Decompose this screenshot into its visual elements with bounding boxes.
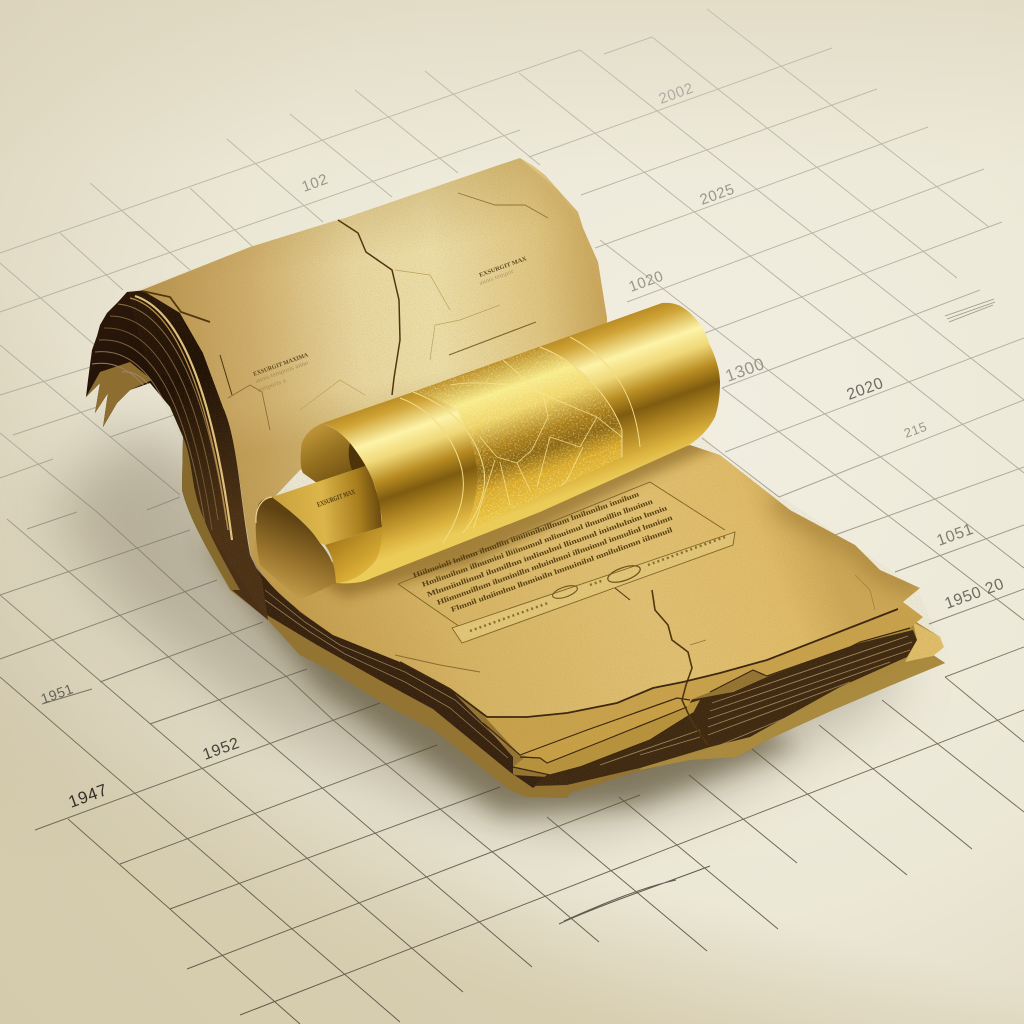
small text block, left of back page: EXSURGIT MAXIMA — [253, 352, 310, 378]
year labels on the grid: 2002 — [657, 80, 696, 108]
light corner sheet — [905, 622, 944, 662]
text lines — [412, 489, 674, 614]
slip of gold inside the curl — [325, 527, 382, 583]
burnt edge of the page — [775, 498, 920, 588]
text lines: Flmnil ulniimlnu llnmiuiln lmnuinilnl mnilulinmn iilmnuil — [450, 525, 674, 614]
small text on rolled sheet: EXSURGIT MAX — [316, 488, 356, 509]
text lines: Hmlinuilnm illnumini lliiinumnl mlinuimul ilnumillin llnuimn — [421, 497, 654, 589]
page lines along the crease — [265, 590, 508, 758]
curled loop interior — [256, 497, 336, 600]
third sheet — [520, 695, 695, 763]
fourth sheet — [513, 700, 700, 775]
golden scroll — [256, 303, 720, 600]
year labels on the grid: 1051 — [935, 521, 976, 550]
grainy base edge along the crease and bottom — [182, 490, 945, 798]
text panel frame — [398, 482, 725, 629]
rule line on back page — [449, 322, 536, 355]
back page shading — [142, 158, 607, 560]
sparkle texture in band — [414, 348, 622, 532]
text lines: Mlnmiiullinml ilumillnn imlinulmi llinumnl inimlulnim lmniu — [426, 503, 668, 599]
back page sheet — [142, 158, 607, 560]
year labels on the grid: 1952 — [201, 735, 242, 764]
year labels on the grid: 1300 — [723, 354, 767, 386]
year labels on the grid: 1020 — [627, 268, 666, 296]
page sheet — [252, 445, 920, 717]
decorated band — [413, 347, 622, 533]
bottom sheet, right corner — [640, 620, 945, 770]
year labels on the grid: 215 — [902, 419, 929, 441]
ornamental band — [452, 532, 735, 643]
page edge lines — [92, 296, 232, 540]
pen stroke near the bottom — [559, 866, 710, 924]
text lines: Hlimnnuillnm iluminilln mluinlmni illnuimnl inmulinl lmnimn — [436, 513, 674, 607]
book: page stack — [182, 490, 945, 798]
small stamp note, upper right — [945, 299, 995, 322]
page lines, right side — [600, 636, 912, 765]
cracks on back page — [142, 193, 548, 430]
text lines: Hiilmoinli lnilmn ilmuliin iiminniluillnum lmilnnilm innilum — [412, 489, 641, 580]
dark curled page stack — [86, 290, 268, 620]
year labels on the grid: 2020 — [845, 375, 886, 404]
small text block, left of back page: temporis a — [257, 378, 287, 394]
book: front open page — [252, 430, 920, 745]
loop rim — [256, 497, 272, 523]
small text block, right of back page: annis tempor — [479, 269, 515, 287]
dark page edges, right side — [533, 630, 917, 786]
year labels on the grid: 1950 20 — [943, 576, 1007, 613]
book: curled back page — [86, 158, 607, 620]
second sheet — [483, 602, 923, 755]
grainy outer strip — [182, 437, 240, 590]
small text block, right of back page — [479, 256, 528, 287]
cracks on front page — [395, 575, 875, 745]
torn page edge — [400, 609, 898, 717]
dark page edges along the crease — [232, 540, 547, 788]
torn tail of the stack — [86, 362, 152, 427]
year labels on the grid: 2025 — [698, 181, 737, 209]
lower rolled sheet — [272, 465, 382, 545]
inner wall of the roll — [301, 423, 372, 483]
year labels on the grid: 1947 — [66, 780, 110, 812]
leaf engraving — [450, 360, 622, 530]
roll body — [323, 303, 720, 583]
year labels on the grid: 1951 — [39, 680, 76, 707]
band bordering arcs — [400, 337, 640, 543]
small text block, left of back page — [253, 352, 310, 394]
dark slit inside the roll — [349, 443, 372, 480]
year labels on the grid — [39, 80, 1007, 812]
year labels on the grid: 102 — [300, 171, 331, 196]
sheet edge lines — [483, 628, 910, 775]
grain over the paper — [80, 150, 950, 810]
drop shadow of the book — [50, 430, 900, 835]
small text block, right of back page: EXSURGIT MAX — [479, 256, 528, 279]
roll's shadow on the page — [324, 445, 714, 601]
small text block, left of back page: annis temporis anno — [255, 360, 309, 385]
